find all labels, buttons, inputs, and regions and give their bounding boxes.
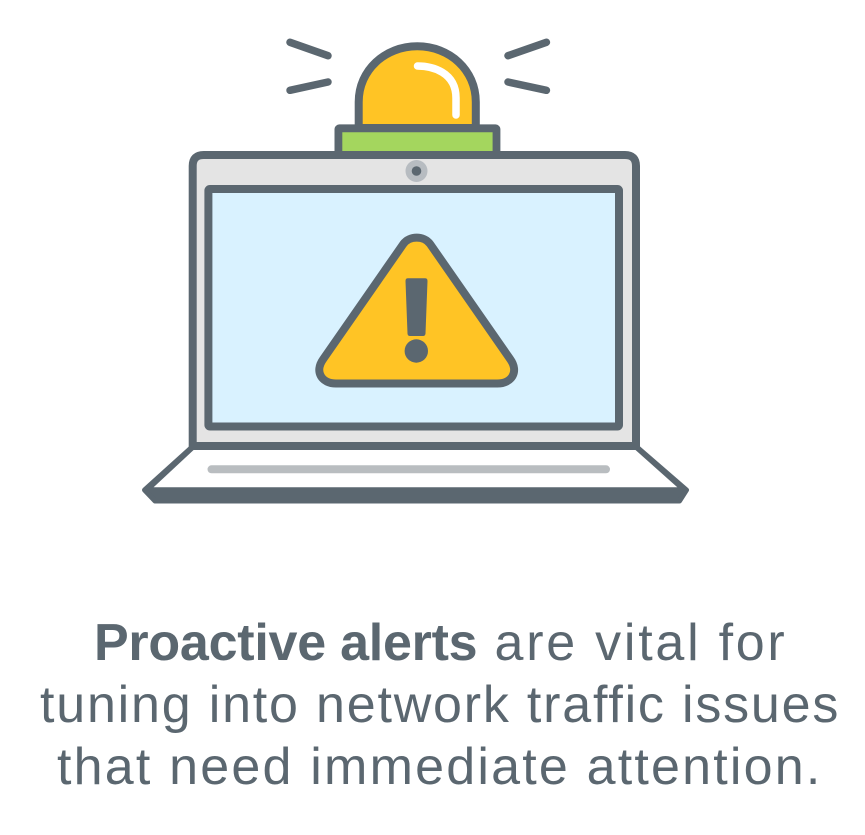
laptop screen <box>208 189 619 426</box>
icon: alarm light rays <box>290 42 546 90</box>
caption text: that need immediate attention. <box>57 738 823 796</box>
laptop lid <box>193 155 636 446</box>
icon: warning triangle <box>319 238 514 384</box>
laptop base <box>144 448 686 501</box>
caption text: tuning into network traffic issues <box>40 676 840 734</box>
illustration: laptop with alarm <box>142 38 690 504</box>
icon: alarm base <box>338 128 496 155</box>
icon: webcam <box>406 160 428 182</box>
icon: alarm dome <box>359 46 476 128</box>
caption text <box>40 614 840 796</box>
caption text: Proactive alerts are vital for <box>94 614 788 672</box>
